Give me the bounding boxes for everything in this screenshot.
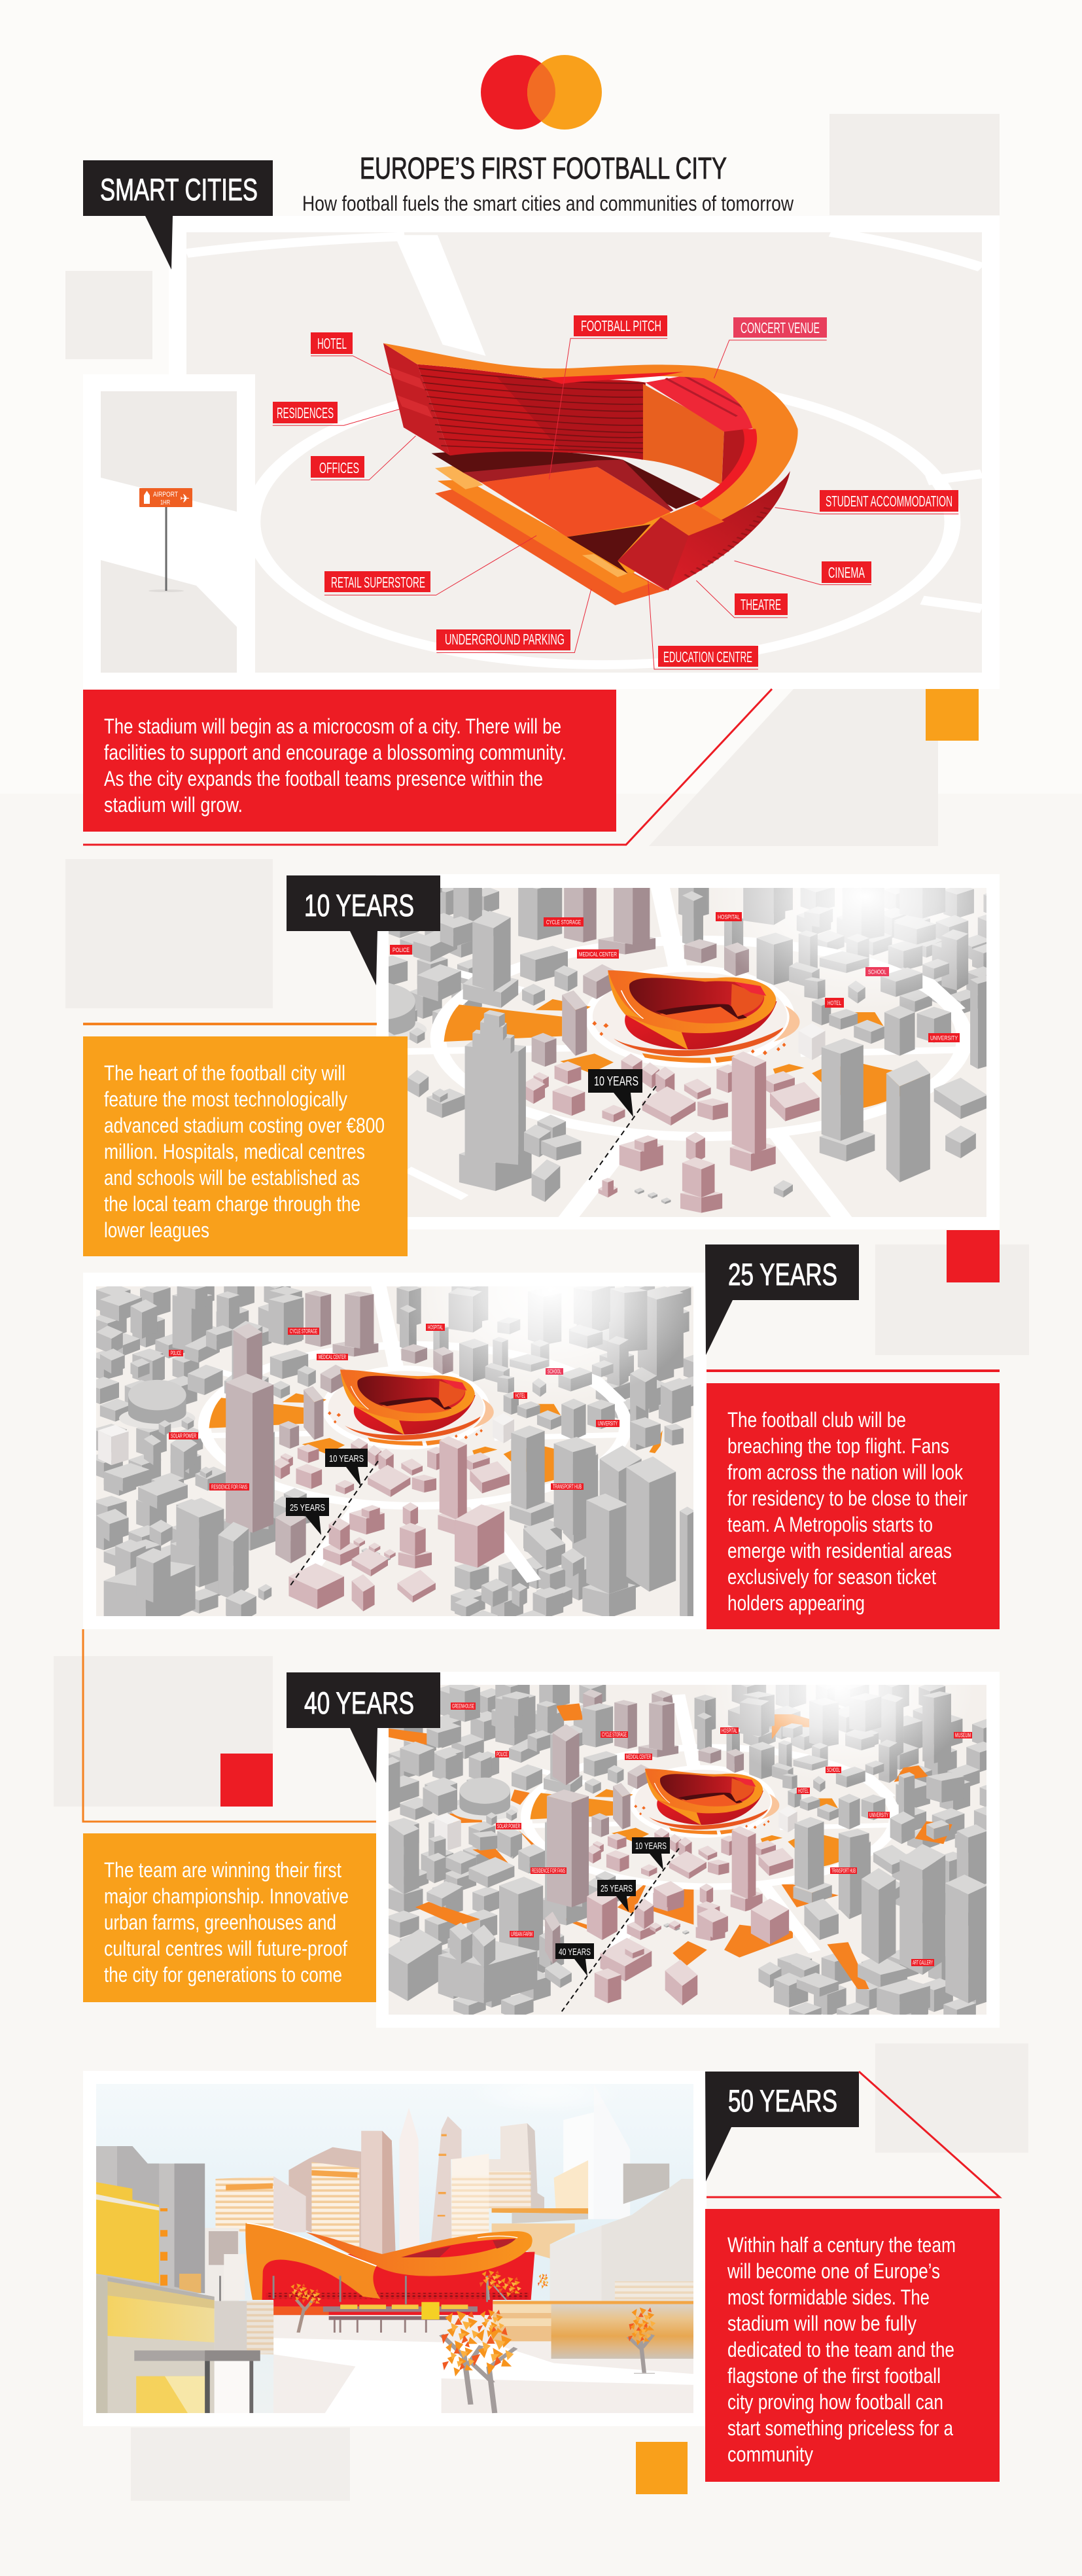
text block: 10 years: lower leagues: [104, 1218, 209, 1242]
text block: intro on red: [83, 690, 616, 832]
map labels 40 years: POLICE: [497, 1751, 508, 1757]
text block: 40 years: cultural centres will future-proof: [104, 1937, 347, 1960]
icon: airport sign: AIRPORT: [153, 491, 178, 499]
map labels 25 years: UNIVERSITY: [598, 1420, 618, 1426]
text block: intro on red: As the city expands the football teams presence within the: [104, 767, 543, 790]
label: cinema: [822, 561, 871, 583]
heading tag: 25 years: 25 YEARS: [728, 1257, 837, 1292]
icon: airport sign: [139, 488, 192, 592]
map labels 10 years: POLICE: [393, 947, 410, 953]
text block: 25 years: exclusively for season ticket: [727, 1565, 936, 1589]
text block: 25 years: holders appearing: [727, 1591, 865, 1615]
text block: 25 years: team. A Metropolis starts to: [727, 1513, 933, 1536]
map labels 25 years: TRANSPORT HUB: [553, 1483, 582, 1490]
red rule 25 years: [707, 1369, 1000, 1372]
callout: 25 years on 40 year map: [597, 1880, 636, 1912]
label: education centre: EDUCATION CENTRE: [663, 648, 752, 665]
decorative grey block top right: [829, 114, 1000, 215]
heading tag: 50 years: [705, 2072, 859, 2181]
text block: 40 years: The team are winning their first: [104, 1858, 341, 1882]
text block: 50 years: start something priceless for a: [727, 2416, 953, 2440]
text block: 25 years: for residency to be close to their: [727, 1487, 968, 1510]
dashed route line 10 years: [589, 1086, 656, 1180]
label: education centre: [658, 646, 758, 667]
red connector line: [83, 689, 772, 845]
label: residences: RESIDENCES: [277, 404, 334, 421]
dashed route line 25 years: [290, 1461, 378, 1585]
map labels 40 years: CYCLE STORAGE: [602, 1731, 627, 1738]
text block: 40 years: [83, 1833, 376, 2002]
label: retail superstore: RETAIL SUPERSTORE: [331, 574, 425, 591]
heading tag: smart cities: [83, 160, 273, 270]
map labels 40 years: HOTEL: [798, 1788, 809, 1794]
label: hotel: [311, 332, 353, 354]
heading tag: 10 years: 10 YEARS: [304, 888, 414, 923]
callout: 10 years on 25 year map: 10 YEARS: [329, 1453, 364, 1464]
callout: 25 years on 40 year map: 25 YEARS: [601, 1883, 633, 1894]
map labels 40 years: HOSPITAL: [722, 1727, 737, 1734]
text block: 50 years: will become one of Europe’s: [727, 2259, 940, 2283]
text block: intro on red: The stadium will begin as a microcosm of a city. There will be: [104, 715, 561, 738]
label: offices: OFFICES: [319, 459, 359, 476]
callout: 25 years on 25 year map: 25 YEARS: [290, 1502, 325, 1513]
map labels 10 years: UNIVERSITY: [930, 1035, 958, 1042]
panel: smart cities hero map: [83, 216, 1000, 689]
map labels 25 years: HOTEL: [515, 1392, 525, 1399]
map labels 40 years: [451, 1703, 972, 1966]
label: retail superstore: [324, 571, 430, 592]
panel: 50 years street scene: [83, 2071, 707, 2426]
map labels 10 years: SCHOOL: [868, 968, 886, 975]
label: offices: [311, 456, 364, 478]
text block: 50 years: city proving how football can: [727, 2390, 943, 2414]
text block: 50 years: dedicated to the team and the: [727, 2338, 954, 2361]
text block: 10 years: The heart of the football city will: [104, 1061, 345, 1085]
callout: 10 years on 40 year map: 10 YEARS: [635, 1841, 667, 1852]
heading tag: 10 years: [287, 875, 440, 985]
orange rule 10 years: [83, 1023, 377, 1025]
text block: 10 years: and schools will be established as: [104, 1166, 360, 1190]
decorative grey block 50 years top: [875, 2043, 1028, 2153]
connector lines for hero labels: [273, 338, 958, 669]
text block: 50 years: Within half a century the team: [727, 2233, 956, 2257]
dashed route line 40 years: [560, 1848, 679, 2014]
callout: 25 years on 25 year map: [286, 1498, 329, 1535]
map labels 10 years: CYCLE STORAGE: [546, 919, 581, 925]
orange square accent: [926, 689, 979, 741]
label: concert venue: [733, 317, 827, 338]
map labels 40 years: RESIDENCE FOR FANS: [532, 1867, 565, 1874]
map labels 40 years: GREENHOUSE: [452, 1703, 474, 1709]
heading tag: 50 years: 50 YEARS: [728, 2083, 837, 2118]
label: concert venue: CONCERT VENUE: [741, 319, 820, 336]
subtitle: How football fuels the smart cities and communities of tomorrow: [302, 192, 794, 215]
heading tag: 40 years: [287, 1672, 440, 1783]
map labels 40 years: MEDICAL CENTER: [626, 1754, 651, 1760]
map labels 25 years: CYCLE STORAGE: [290, 1328, 317, 1335]
label: football pitch: [574, 315, 667, 336]
illustration: ground and road: [273, 2301, 694, 2413]
map labels 40 years: ART GALLERY: [913, 1959, 933, 1966]
decorative grey block 40 years: [54, 1656, 273, 1807]
map labels 10 years: MEDICAL CENTER: [579, 951, 617, 958]
text block: intro on red: stadium will grow.: [104, 793, 243, 817]
label: residences: [273, 402, 338, 423]
label: hotel: HOTEL: [317, 335, 347, 352]
illustration: hero stadium cutaway: [383, 344, 798, 605]
icon: airport sign: 1HR: [160, 499, 170, 506]
illustration: bus stop: [323, 2302, 478, 2333]
illustration: left foreground building: [96, 2276, 273, 2413]
text block: 40 years: the city for generations to come: [104, 1963, 342, 1986]
text block: 40 years: urban farms, greenhouses and: [104, 1911, 336, 1934]
heading tag: 40 years: 40 YEARS: [304, 1685, 414, 1720]
decorative grey polygon under hero: [649, 689, 938, 846]
text block: 25 years: The football club will be: [727, 1408, 906, 1432]
callout: 10 years on map: 10 YEARS: [594, 1074, 638, 1089]
label: football pitch: FOOTBALL PITCH: [581, 317, 661, 334]
map labels 25 years: HOSPITAL: [428, 1324, 443, 1331]
callout: 10 years on 25 year map: [325, 1449, 368, 1487]
panel: 25 years map: [83, 1273, 707, 1629]
map labels 10 years: HOSPITAL: [718, 913, 740, 920]
label: student accommodation: [820, 490, 958, 512]
text block: 10 years: [83, 1036, 408, 1256]
callout: 10 years on 40 year map: [632, 1837, 670, 1870]
map labels 40 years: UNIVERSITY: [869, 1812, 888, 1818]
red square accent 40 years: [220, 1754, 273, 1807]
map labels 25 years: SCHOOL: [548, 1368, 561, 1375]
logo: two overlapping circles: [481, 55, 602, 130]
callout: 10 years on map: [588, 1069, 642, 1117]
illustration: autumn trees: [288, 2270, 655, 2413]
text block: 10 years: feature the most technologically: [104, 1087, 347, 1111]
panel: 40 years map: [376, 1672, 1000, 2028]
map labels 25 years: [169, 1324, 620, 1491]
text block: 25 years: from across the nation will look: [727, 1460, 964, 1484]
panel: 10 years map: [376, 874, 1000, 1229]
orange square accent 50 years: [636, 2442, 688, 2494]
map labels 40 years: URBAN FARM: [511, 1931, 532, 1937]
label: theatre: THEATRE: [741, 596, 781, 613]
red square accent: [947, 1230, 1000, 1282]
map labels 40 years: SOLAR POWER: [497, 1823, 520, 1829]
map labels 10 years: [390, 912, 960, 1042]
label: theatre: [735, 593, 788, 615]
map labels 25 years: MEDICAL CENTER: [319, 1354, 346, 1360]
callout: 40 years on 40 year map: 40 YEARS: [559, 1947, 591, 1958]
text block: 50 years: [705, 2209, 1000, 2482]
label: cinema: CINEMA: [828, 564, 865, 581]
map labels 25 years: RESIDENCE FOR FANS: [211, 1484, 247, 1491]
label: underground parking: UNDERGROUND PARKING: [445, 631, 565, 648]
map labels 25 years: SOLAR POWER: [171, 1433, 196, 1439]
illustration: orange stadium elevation: [220, 2223, 534, 2315]
map labels 40 years: MUSEUM: [955, 1732, 971, 1738]
text block: intro on red: facilities to support and encourage a blossoming community.: [104, 741, 567, 764]
text block: 50 years: stadium will now be fully: [727, 2312, 916, 2335]
icon: airport sign: ✈: [180, 492, 190, 505]
heading tag: 25 years: [705, 1244, 859, 1355]
red triangle line 50 years: [707, 2072, 1000, 2197]
text block: 40 years: major championship. Innovative: [104, 1884, 349, 1908]
illustration: distant skyline: [215, 2084, 694, 2301]
decorative grey block left: [65, 271, 152, 359]
text block: 25 years: breaching the top flight. Fans: [727, 1434, 949, 1458]
text block: 10 years: million. Hospitals, medical centres: [104, 1140, 365, 1163]
map labels 25 years: POLICE: [171, 1350, 181, 1356]
map labels 40 years: SCHOOL: [827, 1767, 840, 1773]
title: EUROPE’S FIRST FOOTBALL CITY: [360, 151, 727, 185]
text block: 50 years: most formidable sides. The: [727, 2285, 930, 2309]
decorative grey block 25 years: [875, 1244, 1029, 1355]
map labels 10 years: HOTEL: [828, 1000, 841, 1006]
illustration: left buildings back: [96, 2146, 245, 2302]
label: underground parking: [436, 629, 570, 650]
heading tag: smart cities: SMART CITIES: [100, 172, 258, 207]
decorative grey block 10 years: [65, 859, 273, 1008]
text block: 10 years: advanced stadium costing over €800: [104, 1114, 385, 1137]
callout: 40 years on 40 year map: [555, 1943, 594, 1976]
text block: 25 years: emerge with residential areas: [727, 1539, 952, 1562]
text block: 50 years: flagstone of the first football: [727, 2364, 941, 2388]
label: student accommodation: STUDENT ACCOMMODATION: [826, 493, 952, 510]
decorative grey block 50 years bottom: [131, 2427, 350, 2501]
map labels 40 years: TRANSPORT HUB: [831, 1867, 856, 1874]
text block: 25 years: [707, 1383, 1000, 1629]
text block: 50 years: community: [727, 2443, 813, 2466]
orange bracket line: [83, 1629, 376, 1822]
text block: 10 years: the local team charge through the: [104, 1192, 360, 1216]
